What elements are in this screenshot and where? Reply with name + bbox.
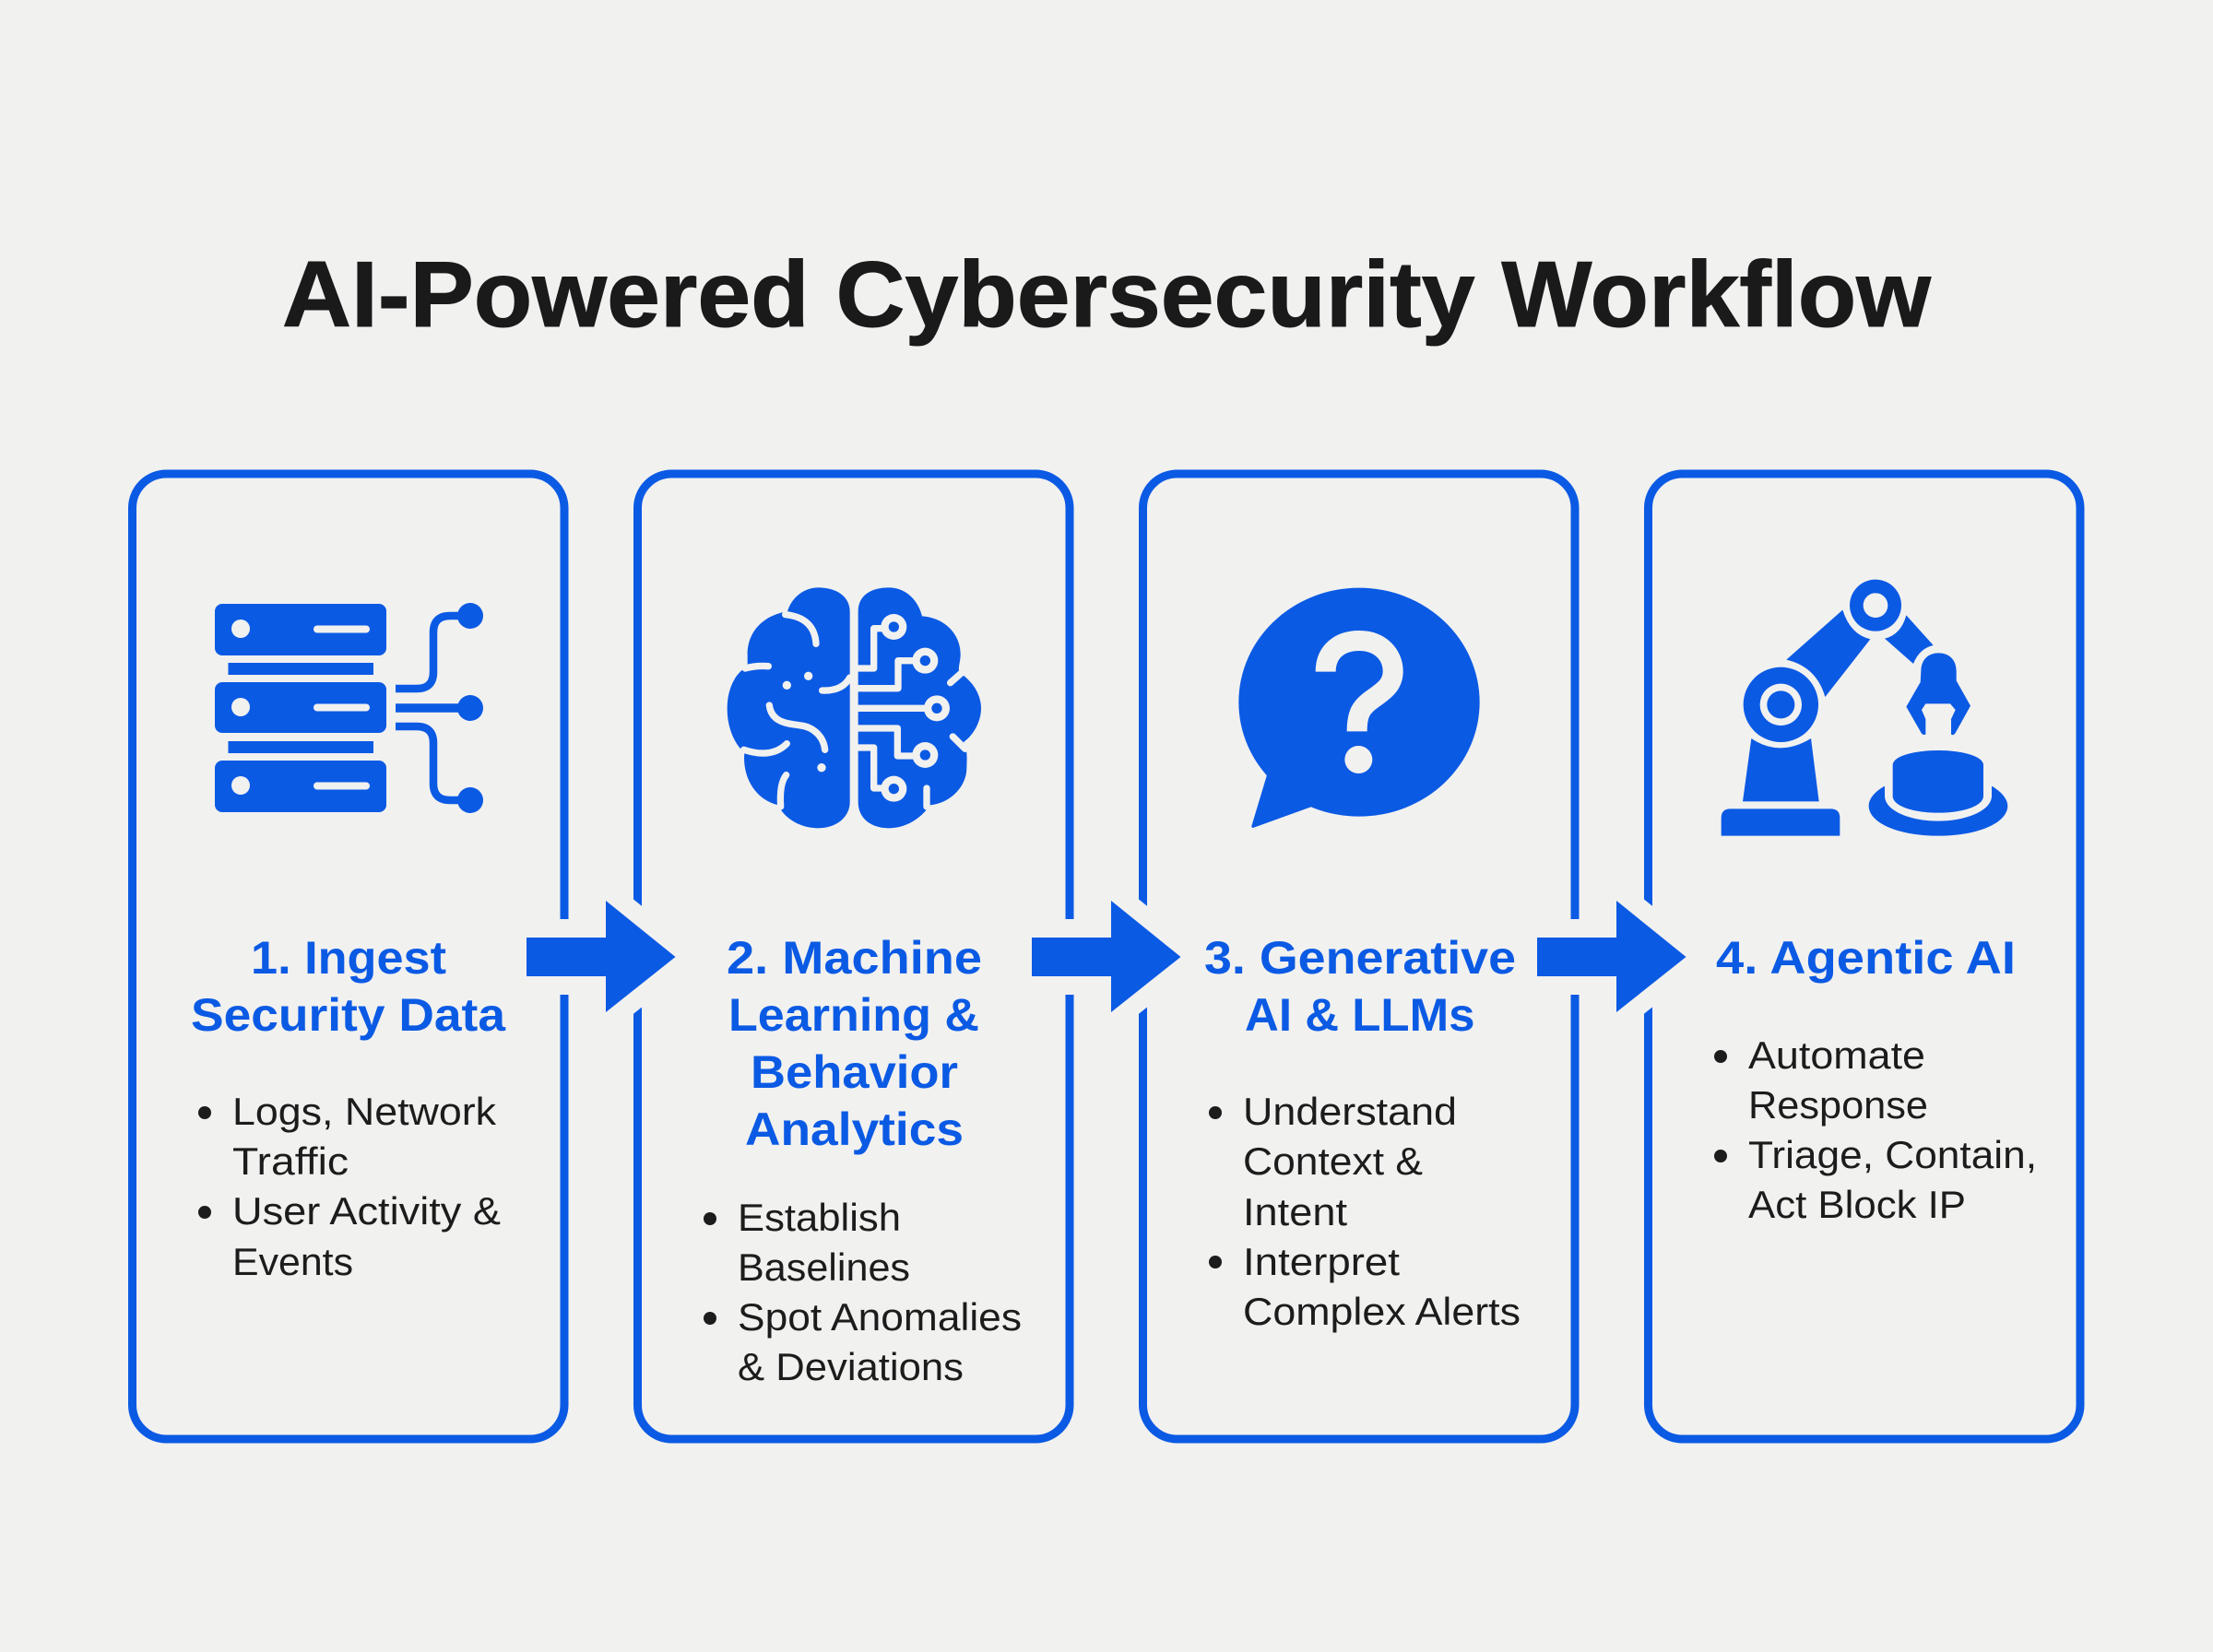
- heading: 2. Machine Learning & Behavior Analytics: [727, 932, 982, 1155]
- bullet list: step 3: Intent: [1243, 1190, 1347, 1233]
- heading: 3. Generative AI & LLMs: AI & LLMs: [1245, 989, 1475, 1041]
- bullet list: step 4: [1714, 1033, 2037, 1226]
- icon: brain with circuit: [728, 587, 981, 828]
- bullet list: step 4: Triage, Contain,: [1748, 1133, 2037, 1176]
- title: AI-Powered Cybersecurity Workflow: [282, 243, 1931, 347]
- panel 4 border: [1649, 474, 2080, 1439]
- heading: 2. Machine Learning & Behavior Analytics: 2. Machine: [727, 932, 982, 984]
- bullet list: step 4: Act Block IP: [1748, 1183, 1966, 1226]
- panel 1 border: [133, 474, 564, 1439]
- heading: 1. Ingest Security Data: [191, 932, 506, 1041]
- heading: 2. Machine Learning & Behavior Analytics: Analytics: [745, 1103, 964, 1155]
- arrow: step 1 to step 2: [527, 901, 675, 1012]
- bullet list: step 2: [704, 1196, 1022, 1388]
- panel: step 2 machine learning: [638, 474, 1070, 1439]
- arrow: step 2 to step 3: [1032, 901, 1180, 1012]
- bullet list: step 1: Events: [232, 1240, 353, 1283]
- bullet list: step 3: Understand: [1243, 1090, 1457, 1133]
- bullet list: step 1: User Activity &: [232, 1189, 501, 1233]
- panel: step 1 ingest security data: [133, 474, 564, 1439]
- bullet list: step 3: Complex Alerts: [1243, 1290, 1521, 1333]
- bullet list: step 1: [198, 1090, 501, 1283]
- bullet list: step 3: [1209, 1090, 1521, 1333]
- bullet list: step 1: Traffic: [232, 1139, 349, 1183]
- heading: 4. Agentic AI: 4. Agentic AI: [1716, 932, 2016, 984]
- heading: 2. Machine Learning & Behavior Analytics: Behavior: [751, 1046, 958, 1098]
- arrow: step 3 to step 4: [1537, 901, 1686, 1012]
- bullet list: step 1: Logs, Network: [232, 1090, 497, 1133]
- heading: 3. Generative AI & LLMs: [1204, 932, 1516, 1041]
- bullet list: step 4: Automate: [1748, 1033, 1925, 1077]
- panel 3 border: [1143, 474, 1575, 1439]
- bullet list: step 2: & Deviations: [738, 1345, 964, 1388]
- panel 2 border: [638, 474, 1070, 1439]
- heading: 3. Generative AI & LLMs: 3. Generative: [1204, 932, 1516, 984]
- heading: 1. Ingest Security Data: 1. Ingest: [251, 932, 446, 984]
- icon: robotic arm with puck: [1722, 580, 2007, 836]
- bullet list: step 4: Response: [1748, 1083, 1928, 1127]
- icon: speech bubble with question mark: [1238, 588, 1480, 828]
- bullet list: step 3: Interpret: [1243, 1240, 1400, 1283]
- panel: step 4 agentic AI: [1649, 474, 2080, 1439]
- bullet list: step 2: Establish: [738, 1196, 901, 1239]
- bullet list: step 2: Spot Anomalies: [738, 1295, 1022, 1339]
- panel: step 3 generative AI: [1143, 474, 1575, 1439]
- heading: 2. Machine Learning & Behavior Analytics: Learning &: [728, 989, 979, 1041]
- icon: server rack with connectors: [215, 603, 483, 813]
- heading: 1. Ingest Security Data: Security Data: [191, 989, 506, 1041]
- bullet list: step 2: Baselines: [738, 1245, 910, 1289]
- bullet list: step 3: Context &: [1243, 1139, 1423, 1183]
